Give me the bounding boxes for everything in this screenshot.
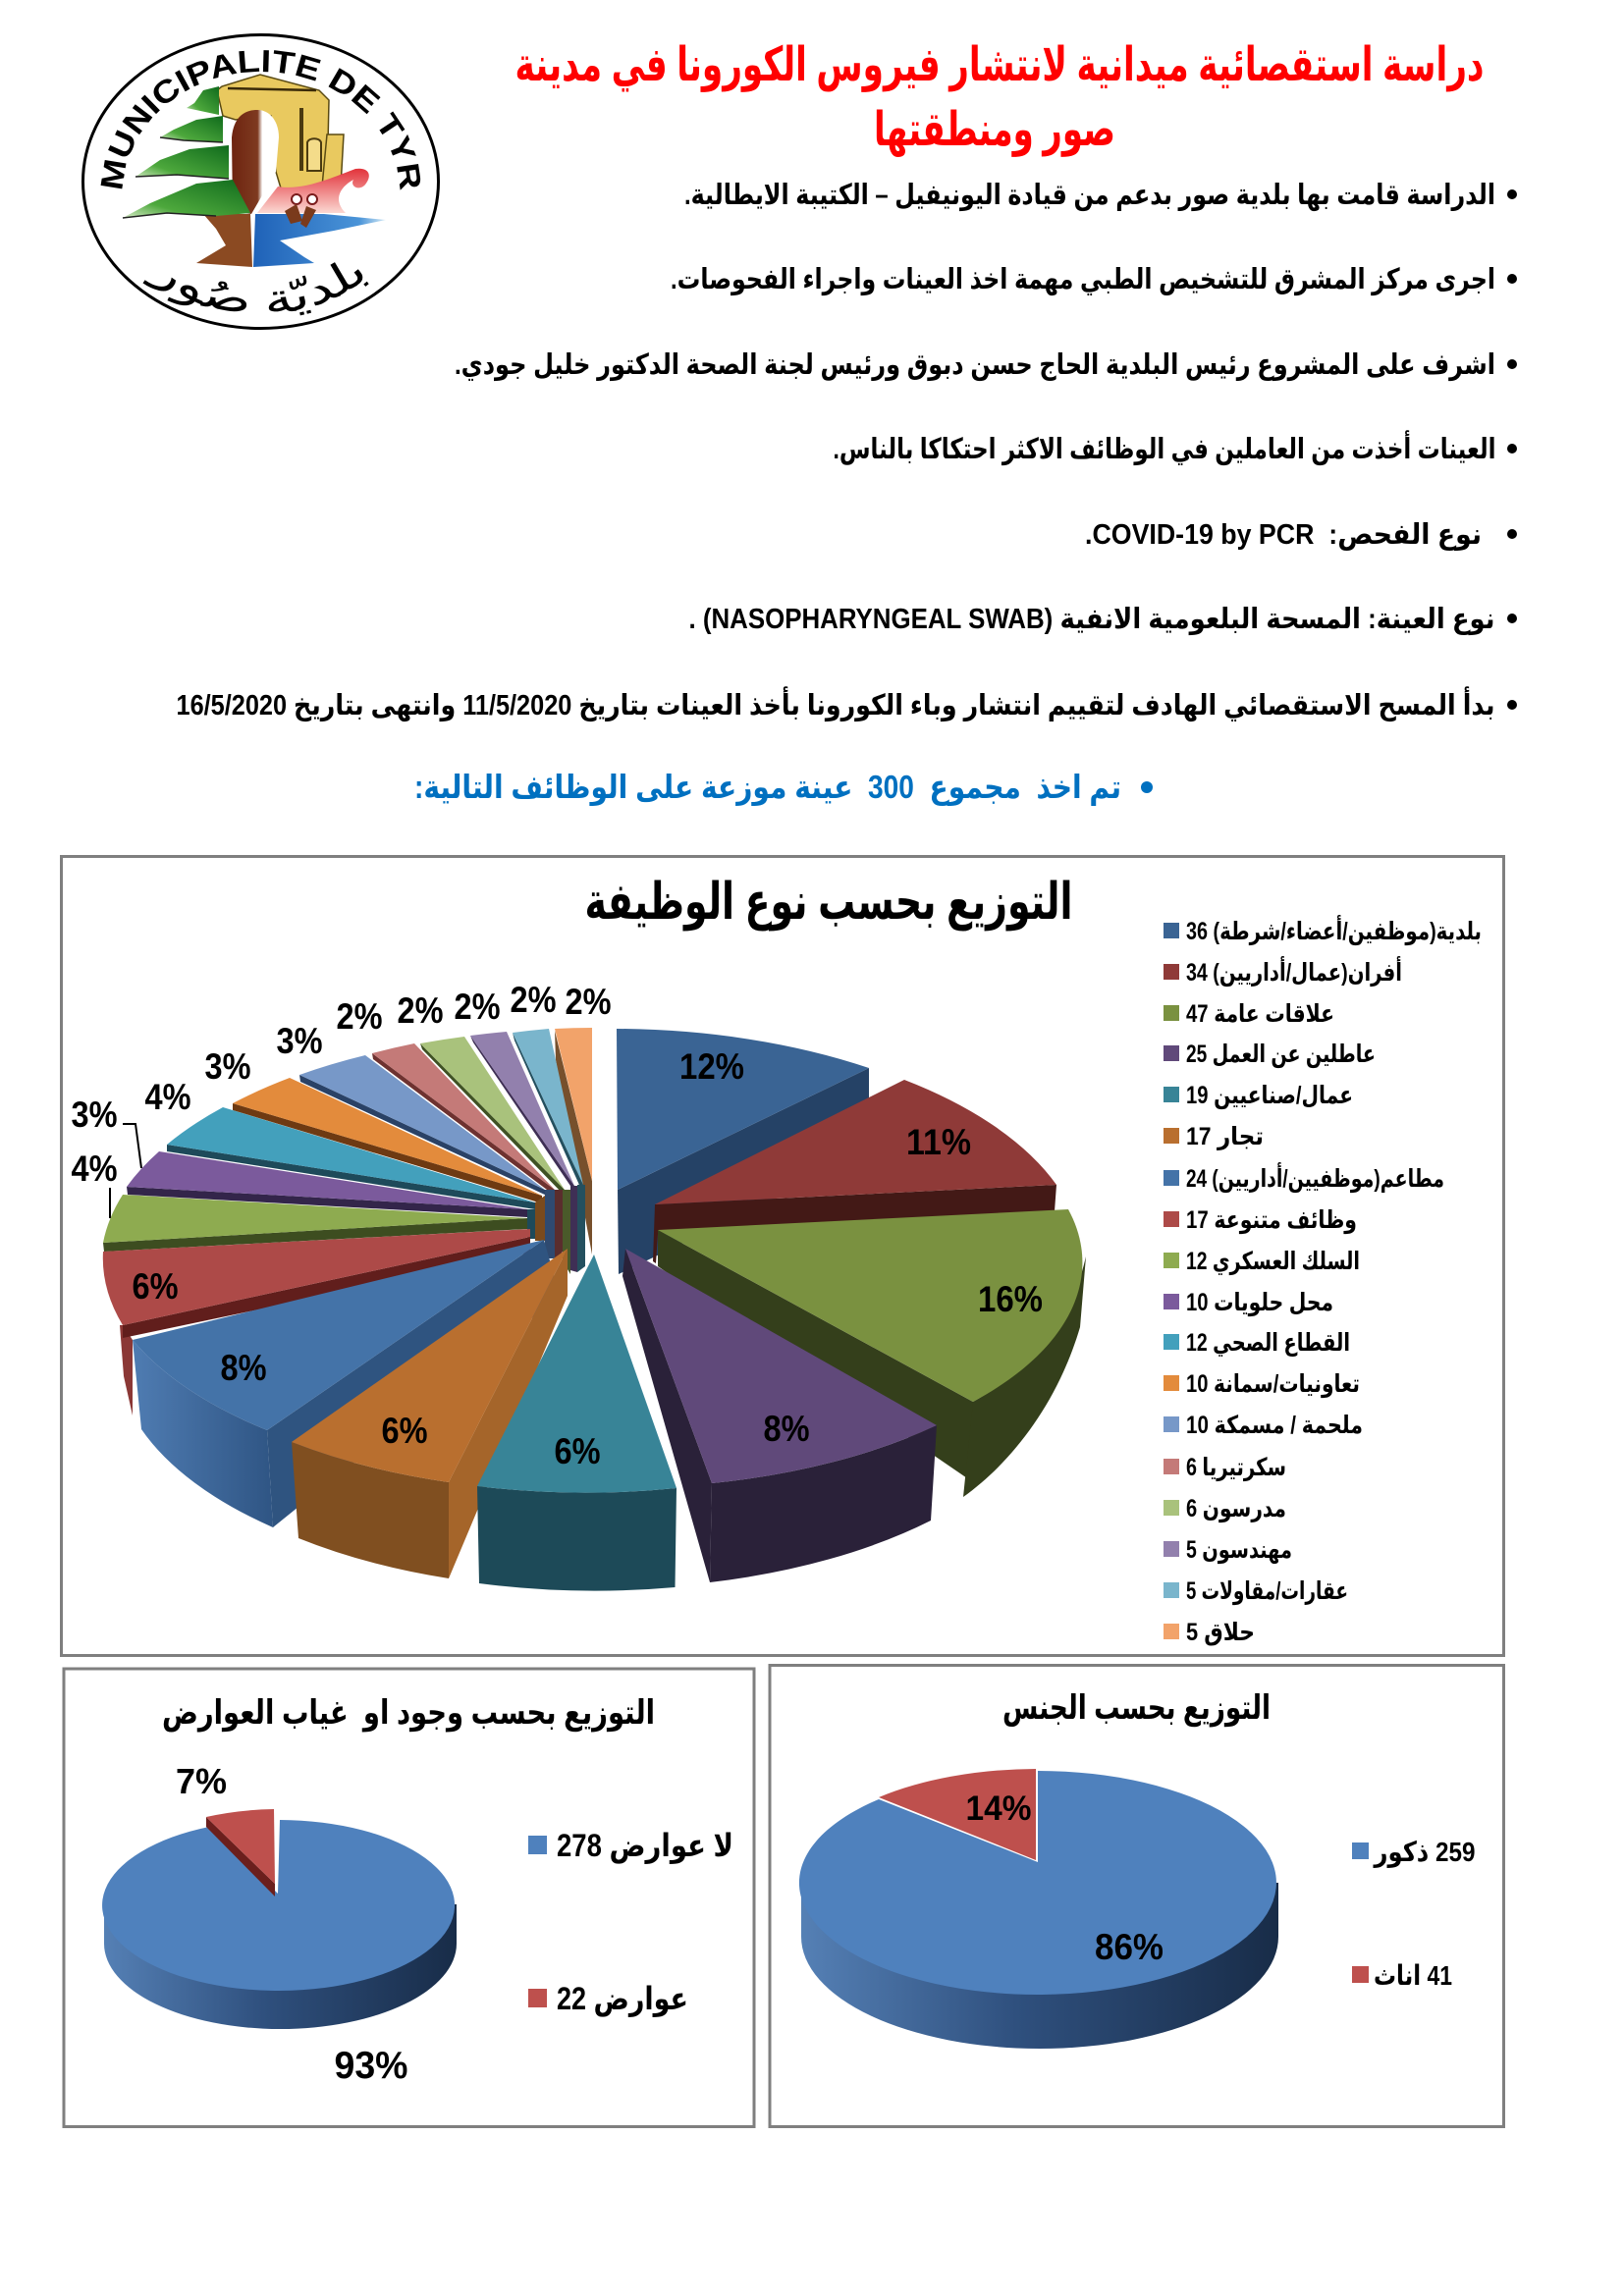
slice: no symptoms <box>102 1820 455 1991</box>
legend row 9: السلك العسكري 12 <box>1186 1248 1360 1276</box>
legend: symptoms: عوارض 22 <box>557 1981 688 2017</box>
pie chart: jobs <box>71 980 1086 1591</box>
legend row 11: القطاع الصحي 12 <box>1186 1329 1350 1357</box>
legend row 1 <box>1164 915 1482 946</box>
slice: health sector <box>167 1107 535 1209</box>
slice: male <box>799 1771 1276 1995</box>
legend row 8: وظائف متنوعة 17 <box>1186 1206 1357 1235</box>
panel border <box>64 1669 754 2126</box>
slice: merchants <box>292 1249 568 1578</box>
legend: no symptoms: لا عوارض 278 <box>557 1828 733 1864</box>
legend row 10: محل حلويات 10 <box>1186 1289 1333 1317</box>
legend row 14: سكرتيريا 6 <box>1186 1454 1286 1482</box>
legend row 3: علاقات عامة 47 <box>1186 1000 1334 1028</box>
label 86%: 86% <box>1095 1927 1164 1967</box>
leader lines <box>110 1124 141 1218</box>
legend row 4 <box>1164 1041 1376 1069</box>
slice: restaurants <box>133 1240 560 1527</box>
percentage labels: 2% <box>566 982 611 1022</box>
percentage labels: 6% <box>554 1431 601 1471</box>
legend row 5: عمال/صناعيين 19 <box>1186 1082 1353 1110</box>
legend row 15 <box>1164 1495 1286 1523</box>
slice: municipality <box>617 1029 869 1274</box>
percentage labels: 2% <box>397 990 444 1031</box>
percentage labels: 16% <box>978 1279 1043 1319</box>
legend: gender <box>1352 1837 1475 1991</box>
logo: arch <box>217 75 344 214</box>
percentage labels: 2% <box>511 980 556 1020</box>
percentage labels: 4% <box>145 1077 190 1117</box>
legend row 12: تعاونيات/سمانة 10 <box>1186 1370 1360 1399</box>
legend row 14 <box>1164 1454 1286 1482</box>
bullet 6: نوع العينة: المسحة البلعومية الانفية (NASOPHARYNGEAL SWAB) . <box>689 604 1494 635</box>
percentage labels: 12% <box>679 1046 744 1087</box>
legend row 1: بلدية(موظفين/أعضاء/شرطة) 36 <box>1186 915 1482 946</box>
label 93%: 93% <box>334 2045 408 2087</box>
legend row 2: أفران(عمال/أداريين) 34 <box>1186 956 1402 988</box>
panel: symptoms distribution <box>64 1669 754 2126</box>
logo lettering: Arabic name: بلديّة صُور <box>143 262 369 316</box>
legend row 18 <box>1164 1619 1255 1646</box>
slice: various jobs <box>103 1229 530 1415</box>
legend: male: 259 ذكور <box>1373 1837 1475 1868</box>
legend row 17: عقارات/مقاولات 5 <box>1186 1577 1348 1606</box>
pie side wall <box>801 1883 1278 2049</box>
logo lettering: Municipalite de Tyr: MUNICIPALITE DE TYR <box>100 50 420 190</box>
bullet 7: بدأ المسح الاستقصائي الهادف لتقييم انتشار وباء الكورونا بأخذ العينات بتاريخ 11/5/2020 وانتهى بتاريخ 16/5/2020 <box>177 686 1495 721</box>
bullet 8: sample total: تم اخذ مجموع 300 عينة موزعة على الوظائف التالية: <box>414 769 1121 807</box>
percentage labels: 2% <box>454 987 501 1027</box>
slice: teachers <box>420 1037 565 1196</box>
title line 2: صور ومنطقتها <box>874 104 1115 157</box>
legend: jobs <box>1164 915 1482 1646</box>
chart title: التوزيع بحسب نوع الوظيفة <box>585 874 1072 932</box>
panel border <box>61 856 1504 1655</box>
pie side wall <box>104 1904 457 2029</box>
panel: gender distribution <box>770 1665 1504 2126</box>
percentage labels: 8% <box>764 1409 809 1449</box>
percentage labels: 11% <box>906 1122 971 1162</box>
slice: unemployed <box>623 1249 937 1582</box>
legend row 17 <box>1164 1577 1348 1606</box>
percentage labels: 2% <box>336 996 383 1037</box>
legend row 13: ملحمة / مسمكة 10 <box>1186 1412 1363 1439</box>
slice: secretaries <box>372 1043 555 1196</box>
panel: job distribution <box>61 856 1504 1655</box>
pie chart: gender <box>799 1769 1278 2049</box>
center stripes <box>527 1185 585 1274</box>
slice: symptoms <box>206 1809 275 1896</box>
legend row 16: مهندسون 5 <box>1186 1536 1292 1565</box>
logo: wave and sea <box>253 169 386 267</box>
legend row 7 <box>1164 1162 1444 1194</box>
slice: military <box>103 1195 527 1252</box>
percentage labels: 6% <box>132 1266 179 1307</box>
slice: engineers <box>470 1032 574 1192</box>
label 14%: 14% <box>966 1789 1031 1828</box>
legend: female: 41 اناث <box>1374 1960 1452 1991</box>
slice: bakeries <box>653 1080 1056 1263</box>
legend row 2 <box>1164 956 1402 988</box>
slice: real estate <box>513 1029 583 1194</box>
percentage labels <box>71 980 1043 1471</box>
legend row 7: مطاعم(موظفيين/أداريين) 24 <box>1186 1162 1444 1194</box>
percentage labels: 3% <box>204 1046 251 1087</box>
slice: public relations <box>658 1209 1086 1497</box>
logo ring <box>82 35 438 328</box>
slice: sweets shop <box>127 1151 527 1217</box>
percentage labels: 6% <box>381 1411 428 1451</box>
slice: workers <box>477 1255 677 1591</box>
slice: cooperatives <box>233 1078 542 1203</box>
logo: cedar tree <box>123 86 252 267</box>
bullet list <box>177 180 1517 807</box>
legend row 16 <box>1164 1536 1292 1565</box>
pie chart: symptoms <box>102 1761 457 2087</box>
slice: butcher and fish <box>299 1055 547 1196</box>
legend row 15: مدرسون 6 <box>1186 1495 1286 1523</box>
legend row 4: عاطلين عن العمل 25 <box>1186 1041 1376 1069</box>
percentage labels: 3% <box>71 1095 118 1135</box>
chart title: التوزيع بحسب الجنس <box>1002 1689 1271 1728</box>
percentage labels: 3% <box>277 1021 322 1061</box>
logo: Municipality of Tyre <box>81 33 440 330</box>
panel border <box>770 1665 1504 2126</box>
label 7%: 7% <box>176 1761 227 1801</box>
bullet 5: نوع الفحص: COVID-19 by PCR. <box>1085 519 1482 551</box>
legend row 18: حلاق 5 <box>1186 1619 1255 1646</box>
chart title: التوزيع بحسب وجود او غياب العوارض <box>162 1694 655 1733</box>
legend: symptoms <box>528 1828 733 2017</box>
slice: barber <box>555 1028 592 1255</box>
title <box>514 39 1485 157</box>
legend row 9 <box>1164 1248 1360 1276</box>
percentage labels: 4% <box>71 1148 118 1189</box>
slice: female <box>879 1769 1036 1860</box>
legend row 6: تجار 17 <box>1186 1123 1264 1150</box>
percentage labels: 8% <box>220 1348 267 1388</box>
